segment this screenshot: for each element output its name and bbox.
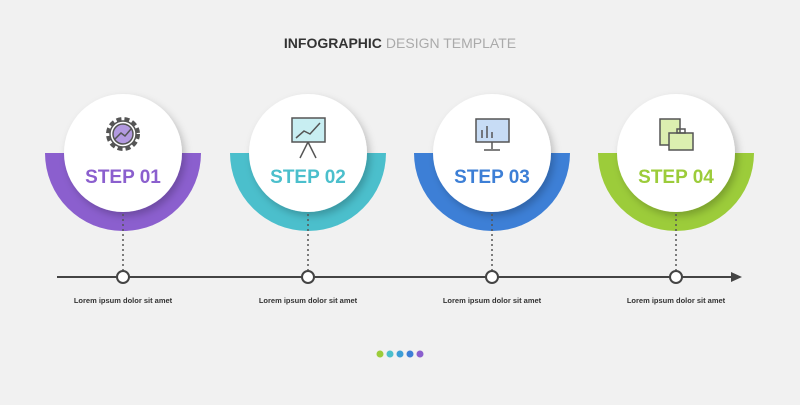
icon: gear chart [108, 119, 138, 149]
step 4: STEP 04 [638, 167, 714, 188]
step 2 [230, 94, 386, 305]
icon: document briefcase [660, 119, 693, 150]
timeline axis [57, 272, 742, 282]
step 3: Lorem ipsum dolor sit amet [443, 296, 542, 305]
step 1: STEP 01 [85, 167, 161, 188]
icon: monitor [476, 119, 509, 150]
title: INFOGRAPHIC DESIGN TEMPLATE [284, 35, 516, 51]
step 4 [598, 94, 754, 305]
icon: presentation board [292, 118, 325, 158]
step 4: Lorem ipsum dolor sit amet [627, 296, 726, 305]
step 1: Lorem ipsum dolor sit amet [74, 296, 173, 305]
step 2: STEP 02 [270, 167, 346, 188]
step 1 [45, 94, 201, 305]
pagination dots [376, 350, 424, 358]
step 3: STEP 03 [454, 167, 530, 188]
step 3 [414, 94, 570, 305]
step 2: Lorem ipsum dolor sit amet [259, 296, 358, 305]
